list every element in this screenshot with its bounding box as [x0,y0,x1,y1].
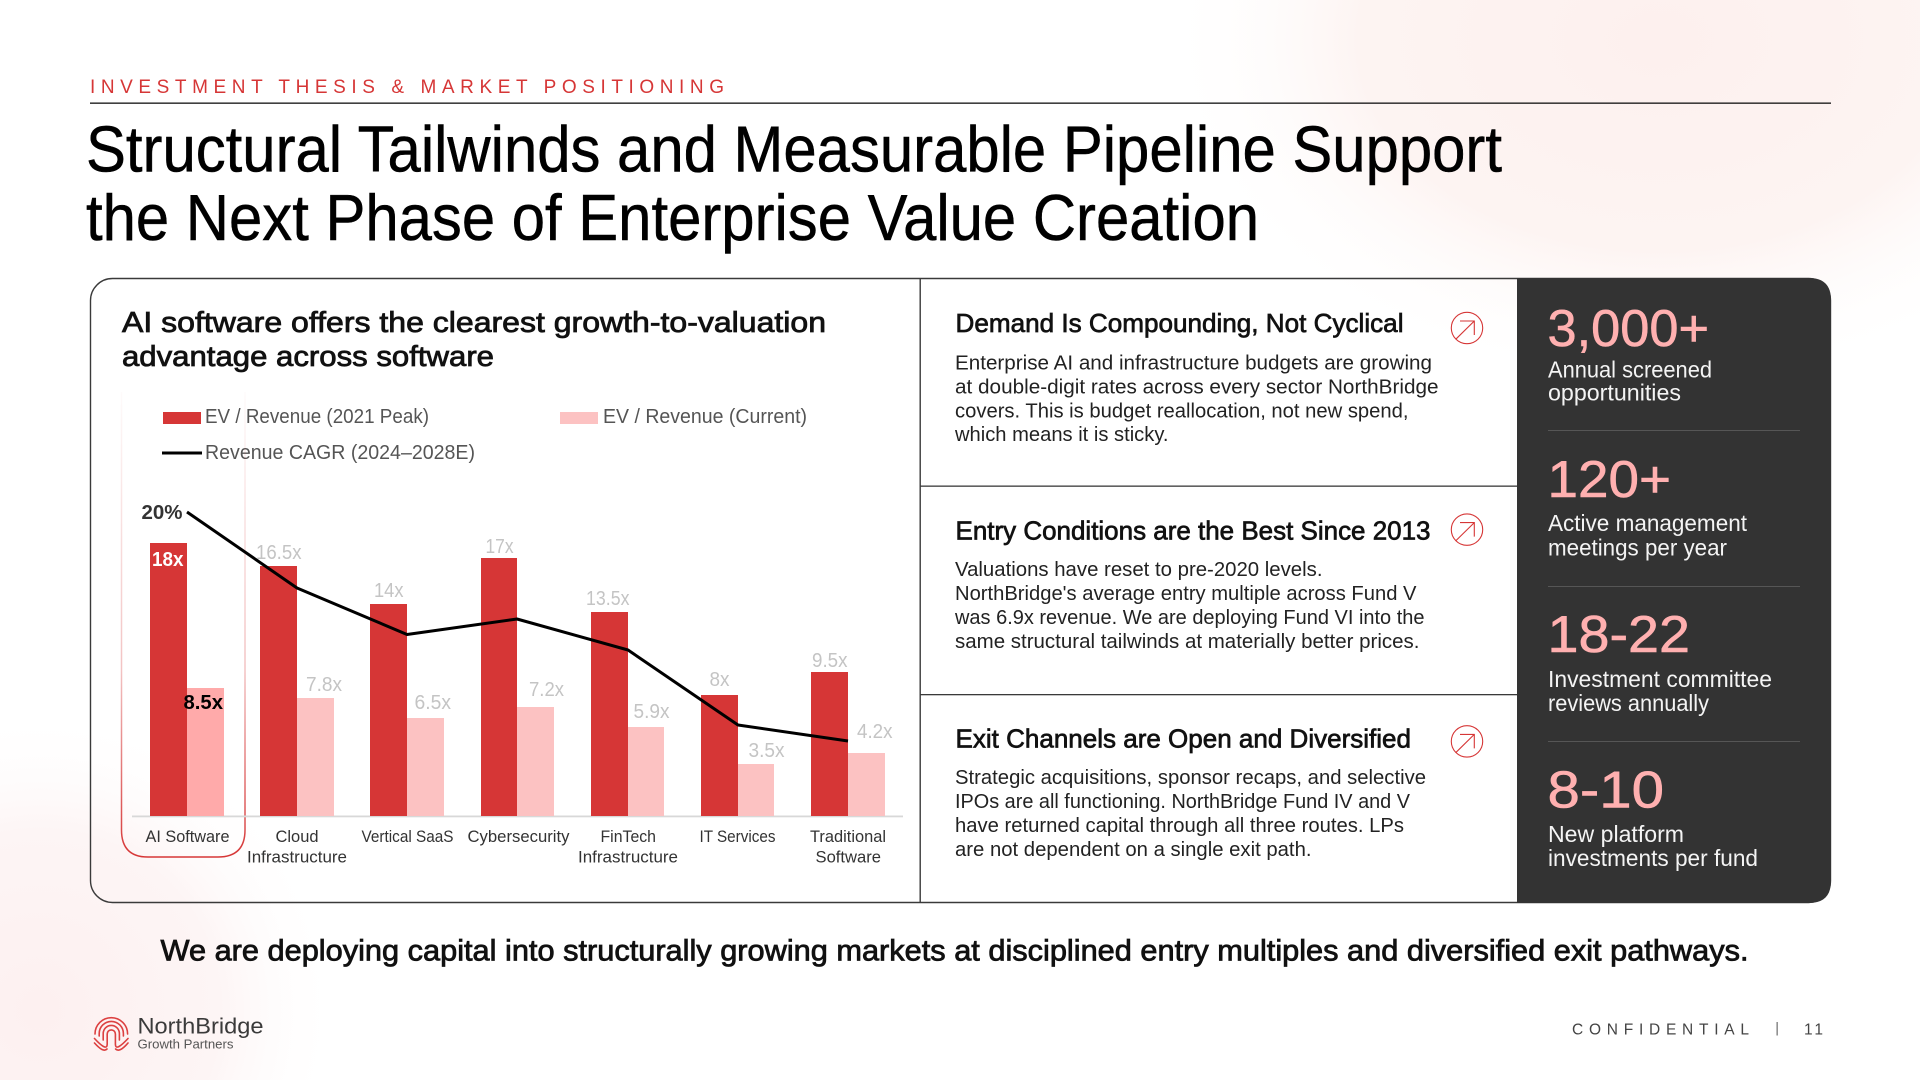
data labels: 3.5x [748,740,784,762]
category labels: Software [816,848,881,866]
category labels: Cybersecurity [468,827,570,846]
point: entry conditions: NorthBridge's average entry multiple across Fund V [955,582,1417,605]
panel: chart [122,307,903,866]
metric: management meetings: 120+ [1548,451,1671,509]
category labels: Cloud [276,827,318,846]
current bars [187,688,885,816]
data labels: 5.9x [634,701,670,723]
metric: screened opportunities: Annual screened [1548,356,1712,382]
metrics background [1517,278,1831,903]
logo: NorthBridge: Growth Partners [138,1036,234,1052]
footer: confidentiality and page number: 11 [1804,1022,1823,1038]
metric: committee reviews: reviews annually [1548,690,1709,716]
point: entry conditions: Entry Conditions are the Best Since 2013 [956,516,1430,546]
metric: committee reviews [1548,606,1772,716]
data labels: 8x [710,669,730,691]
category labels: Infrastructure [578,848,678,866]
logo: NorthBridge [94,1014,264,1052]
metric: screened opportunities: opportunities [1548,380,1681,406]
data labels: 9.5x [812,650,848,672]
point: exit channels [955,724,1426,861]
title: the Next Phase of Enterprise Value Creation [86,181,1259,254]
main card outline [90,278,1830,902]
legend [162,406,807,464]
logo: NorthBridge: NorthBridge [138,1014,264,1038]
title [86,112,1502,254]
data labels [256,536,892,762]
panel: key metrics [1517,278,1831,903]
category labels [146,827,886,866]
point: entry conditions: Valuations have reset to pre-2020 levels. [955,558,1322,581]
chart heading [122,307,826,373]
point: demand: at double-digit rates across every sector NorthBridge [955,376,1438,398]
footer: confidentiality and page number: CONFIDENTIAL [1572,1022,1749,1038]
category labels: AI Software [146,827,230,846]
category labels: FinTech [600,827,656,846]
icon: arrow circle [1451,726,1483,757]
takeaway statement: We are deploying capital into structurally growing markets at disciplined entry multiples and diversified exit pathways. [160,934,1748,968]
category labels: Traditional [810,827,886,846]
data labels: 16.5x [256,542,302,564]
data labels: 7.2x [529,679,564,701]
point: entry conditions: same structural tailwinds at materially better prices. [955,630,1420,653]
category labels: Infrastructure [247,848,347,866]
panel divider [920,278,921,903]
chart heading: advantage across software [122,341,494,373]
highlighted data labels: 18x [152,549,184,571]
highlight box: AI Software [122,392,245,857]
point: demand: covers. This is budget reallocation, not new spend, [955,400,1408,422]
peak bars [150,543,848,816]
highlighted data labels: 8.5x [184,692,223,714]
point: exit channels: Strategic acquisitions, sponsor recaps, and selective [955,766,1426,789]
panel: thesis points [920,308,1517,861]
metric: platform investments [1548,762,1758,871]
metric: management meetings: meetings per year [1548,534,1727,560]
legend: EV / Revenue (2021 Peak) [205,406,429,428]
data labels: 4.2x [857,721,892,743]
point: exit channels: are not dependent on a single exit path. [955,838,1312,861]
chart heading: AI software offers the clearest growth-to-valuation [122,307,826,339]
metric: platform investments: New platform [1548,821,1684,847]
point: demand [954,308,1438,446]
icon: arrow circle [1451,312,1483,344]
point: demand: Demand Is Compounding, Not Cyclical [956,308,1404,338]
point: exit channels: IPOs are all functioning. NorthBridge Fund IV and V [955,790,1410,813]
point: demand: which means it is sticky. [954,423,1168,446]
category labels: IT Services [700,827,776,846]
metric: management meetings [1548,451,1748,560]
category labels: Vertical SaaS [362,827,454,846]
metric: committee reviews: 18-22 [1548,606,1690,664]
metric: screened opportunities [1548,300,1712,406]
header rule [90,102,1831,104]
eyebrow label: INVESTMENT THESIS & MARKET POSITIONING [90,77,724,98]
data labels: 17x [486,536,514,558]
icon: logo mark [94,1018,128,1050]
point: demand: Enterprise AI and infrastructure budgets are growing [955,352,1432,374]
metric: committee reviews: Investment committee [1548,666,1772,692]
title: Structural Tailwinds and Measurable Pipeline Support [86,112,1502,186]
point: entry conditions [954,516,1430,653]
point: exit channels: Exit Channels are Open and Diversified [956,724,1411,754]
metric: platform investments: 8-10 [1548,762,1664,820]
metric: management meetings: Active management [1548,510,1748,536]
highlighted data labels: 20% [142,502,183,524]
axis [132,816,903,817]
data labels: 7.8x [306,674,342,696]
metric dividers [1548,430,1800,742]
legend: Revenue CAGR (2024–2028E) [205,442,475,464]
highlighted data labels [142,502,223,714]
legend: EV / Revenue (Current) [603,406,807,428]
data labels: 13.5x [586,588,630,610]
metric: screened opportunities: 3,000+ [1548,300,1709,358]
row dividers [920,486,1517,695]
point: exit channels: have returned capital through all three routes. LPs [955,814,1404,837]
data labels: 6.5x [414,692,451,714]
metric: platform investments: investments per fund [1548,845,1758,871]
point: entry conditions: was 6.9x revenue. We are deploying Fund VI into the [954,606,1424,629]
CAGR line [187,512,848,741]
data labels: 14x [374,580,404,602]
icon: arrow circle [1451,514,1483,545]
